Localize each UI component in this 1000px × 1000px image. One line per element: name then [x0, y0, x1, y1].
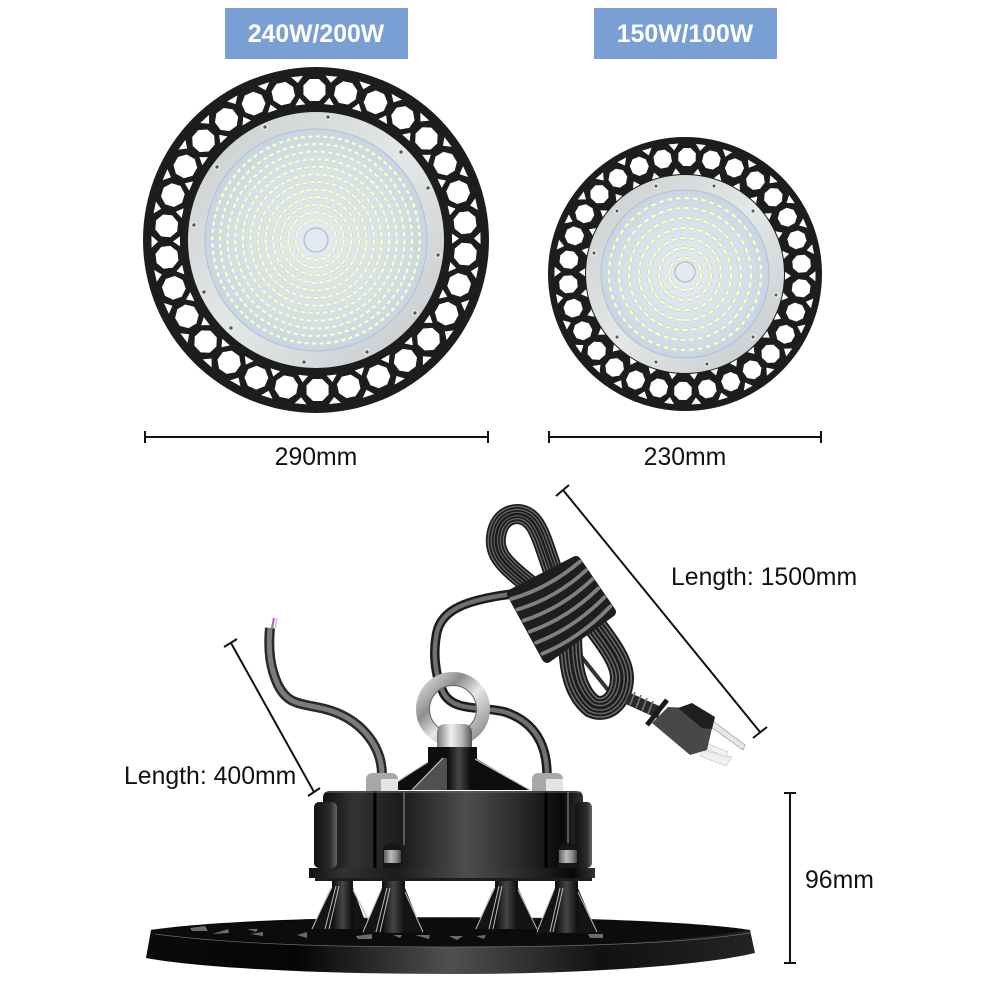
small lamp front view [548, 137, 822, 411]
dimension: Length 1500mm: Length: 1500mm [671, 564, 857, 591]
dimension: Length 1500mm [556, 485, 857, 738]
cable glands [366, 773, 563, 791]
cord coil wraps [511, 561, 611, 658]
label: 240W/200W: 240W/200W [248, 21, 385, 48]
label: 150W/100W [594, 8, 777, 59]
upper cord loop [496, 514, 556, 585]
dimension: 290mm: 290mm [275, 444, 357, 471]
dimension: 230mm [549, 431, 821, 471]
fixture side view [146, 679, 755, 974]
short cable with stripped wires [269, 618, 382, 775]
top mount [398, 747, 530, 790]
cord from fixture to coil [435, 594, 547, 775]
support legs [312, 877, 597, 933]
housing [314, 791, 592, 868]
plug [627, 692, 745, 766]
dimension: 96mm: 96mm [805, 867, 874, 894]
mounting plate [309, 868, 595, 881]
lower cord loop [570, 622, 622, 708]
large lamp front view [143, 67, 489, 413]
dimension: Length 400mm: Length: 400mm [124, 763, 296, 790]
power cord with coil and plug [435, 514, 745, 775]
dimension: 230mm: 230mm [644, 444, 726, 471]
dimension: 96mm [784, 793, 874, 963]
dimension: 290mm [145, 431, 488, 471]
dimension: Length 400mm [124, 639, 320, 796]
base disc [146, 917, 755, 974]
bolts [383, 843, 578, 868]
eye bolt [423, 679, 483, 747]
label: 150W/100W: 150W/100W [617, 21, 754, 48]
label: 240W/200W [225, 8, 408, 59]
